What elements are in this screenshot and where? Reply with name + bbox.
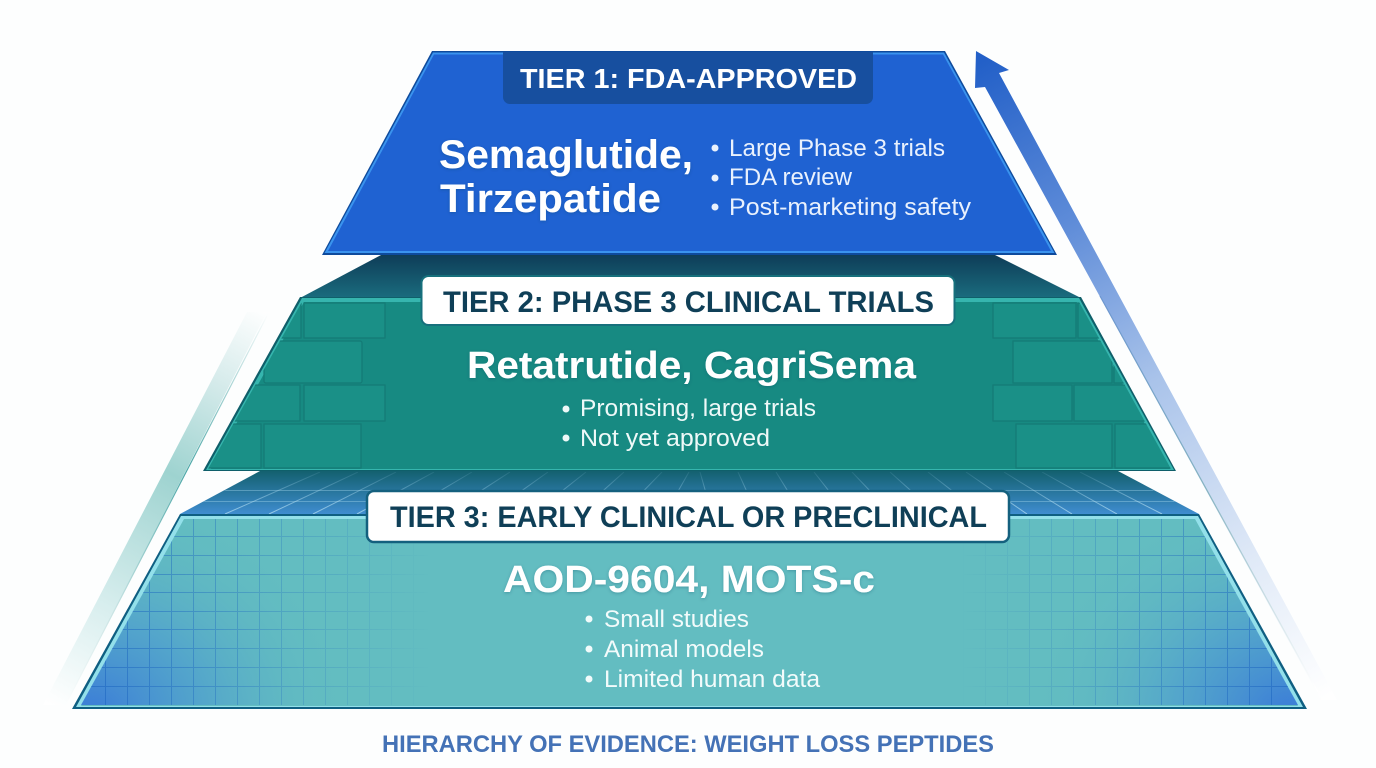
tier 1 label bbox=[503, 52, 873, 104]
tier 1 evidence bullets: Large Phase 3 trials bbox=[729, 135, 945, 162]
tier 3 evidence bullets: Animal models bbox=[604, 636, 764, 663]
title: HIERARCHY OF EVIDENCE: WEIGHT LOSS PEPTIDES bbox=[382, 731, 994, 758]
tier 1 trapezoid bbox=[322, 51, 1057, 255]
panel: tier 1 FDA-approved bbox=[322, 51, 1057, 255]
tier 1 peptide names: Semaglutide, bbox=[439, 133, 693, 177]
tier 2 peptide names: Retatrutide, CagriSema bbox=[467, 345, 917, 387]
tier 3 label bbox=[367, 491, 1009, 542]
tier 2 brick texture left bbox=[190, 303, 385, 468]
arrow: evidence strength rising bbox=[975, 51, 1337, 700]
panel: tier 2 phase 3 clinical trials bbox=[190, 254, 1185, 471]
tier 1 evidence bullets: Post-marketing safety bbox=[729, 194, 971, 221]
tier 3 label: TIER 3: EARLY CLINICAL OR PRECLINICAL bbox=[390, 501, 987, 534]
tier 2 label: TIER 2: PHASE 3 CLINICAL TRIALS bbox=[443, 286, 934, 319]
tier 3 grid pattern bbox=[60, 519, 1320, 706]
tier 1 peptide names bbox=[439, 133, 693, 221]
tier 3 evidence bullets bbox=[586, 606, 821, 693]
tier 3 top surface bbox=[180, 471, 1199, 514]
tier 1 label: TIER 1: FDA-APPROVED bbox=[520, 63, 857, 94]
tier 3 front face bbox=[60, 510, 1320, 710]
tier 2 front face bbox=[190, 297, 1185, 471]
tier 1 evidence bullets bbox=[712, 135, 971, 221]
tier 2 brick texture right bbox=[993, 303, 1185, 468]
tier 2 top surface bbox=[300, 254, 1081, 298]
tier 1 evidence bullets: FDA review bbox=[729, 164, 853, 191]
tier 2 evidence bullets: Promising, large trials bbox=[580, 395, 816, 422]
tier 2 evidence bullets bbox=[562, 395, 816, 452]
tier 3 evidence bullets: Small studies bbox=[604, 606, 749, 633]
tier 2 label bbox=[422, 276, 954, 325]
panel: tier 3 early clinical or preclinical bbox=[60, 471, 1320, 710]
tier 1 peptide names: Tirzepatide bbox=[440, 177, 661, 221]
left faded ascent stripe bbox=[43, 312, 269, 705]
tier 3 evidence bullets: Limited human data bbox=[604, 666, 821, 693]
tier 2 evidence bullets: Not yet approved bbox=[580, 425, 770, 452]
tier 3 peptide names: AOD-9604, MOTS-c bbox=[503, 559, 875, 601]
